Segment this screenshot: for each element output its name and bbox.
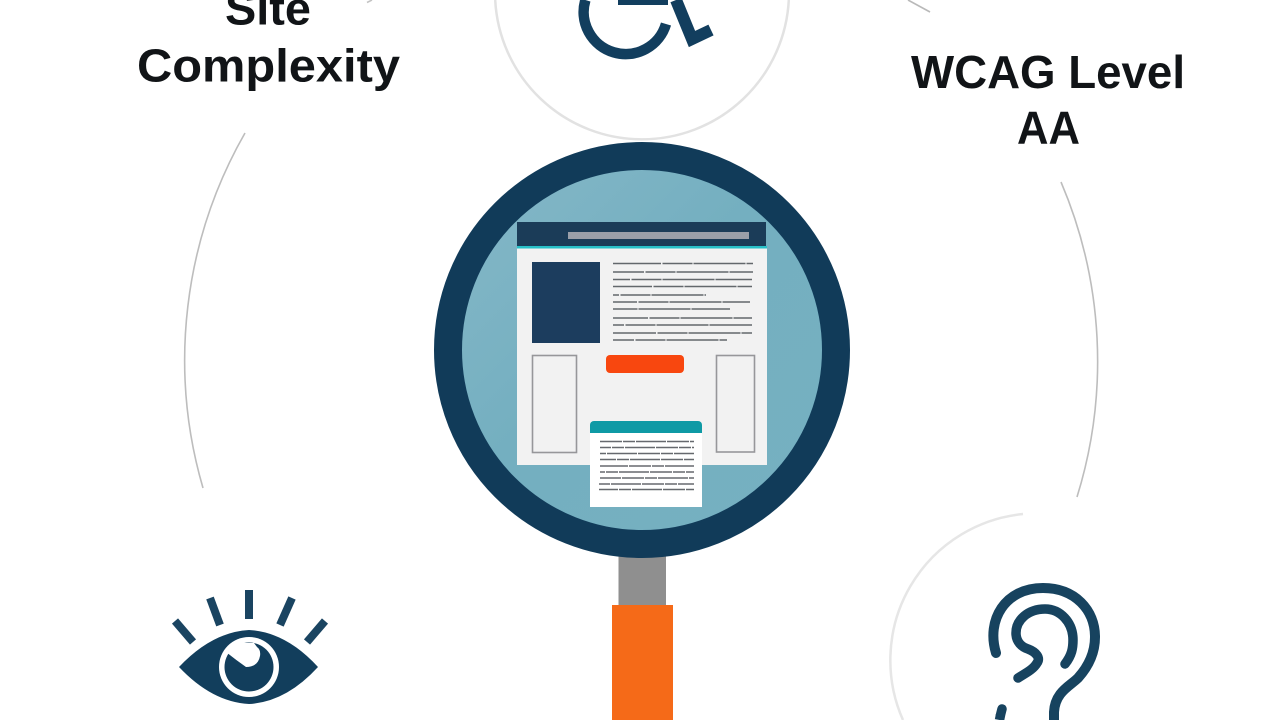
heading: WCAG level AA xyxy=(911,46,1185,154)
image block xyxy=(532,262,600,343)
panel: accessibility icon circle xyxy=(495,0,789,139)
page body xyxy=(517,247,767,465)
address bar xyxy=(568,232,749,239)
heading: site complexity: Complexity xyxy=(137,40,400,92)
connecting ring arc: left xyxy=(185,133,245,488)
popup card xyxy=(590,421,702,507)
card text lines xyxy=(599,442,694,490)
connecting ring arc: top right xyxy=(908,0,930,12)
magnifying glass xyxy=(448,156,836,720)
browser header xyxy=(517,222,766,247)
eye lashes xyxy=(175,590,325,642)
icon: wheelchair xyxy=(584,0,711,54)
eye shape xyxy=(179,630,318,704)
website mockup xyxy=(517,222,767,507)
orange button xyxy=(606,355,684,373)
connecting ring arc: top left xyxy=(367,0,372,2)
heading: WCAG level AA: AA xyxy=(1017,102,1080,154)
icon: ear xyxy=(993,588,1095,720)
right sidebar box xyxy=(716,356,754,452)
icon: eye with lashes xyxy=(175,590,325,704)
magnifier handle grip xyxy=(612,605,673,720)
body text lines xyxy=(613,264,753,340)
left sidebar box xyxy=(532,356,576,452)
magnifier lens xyxy=(448,156,836,544)
panel: hearing icon circle xyxy=(890,514,1095,720)
heading: site complexity xyxy=(137,0,400,92)
connecting ring arc: right xyxy=(1061,182,1098,497)
magnifier handle neck xyxy=(618,552,666,606)
heading: WCAG level AA: WCAG Level xyxy=(911,46,1185,98)
